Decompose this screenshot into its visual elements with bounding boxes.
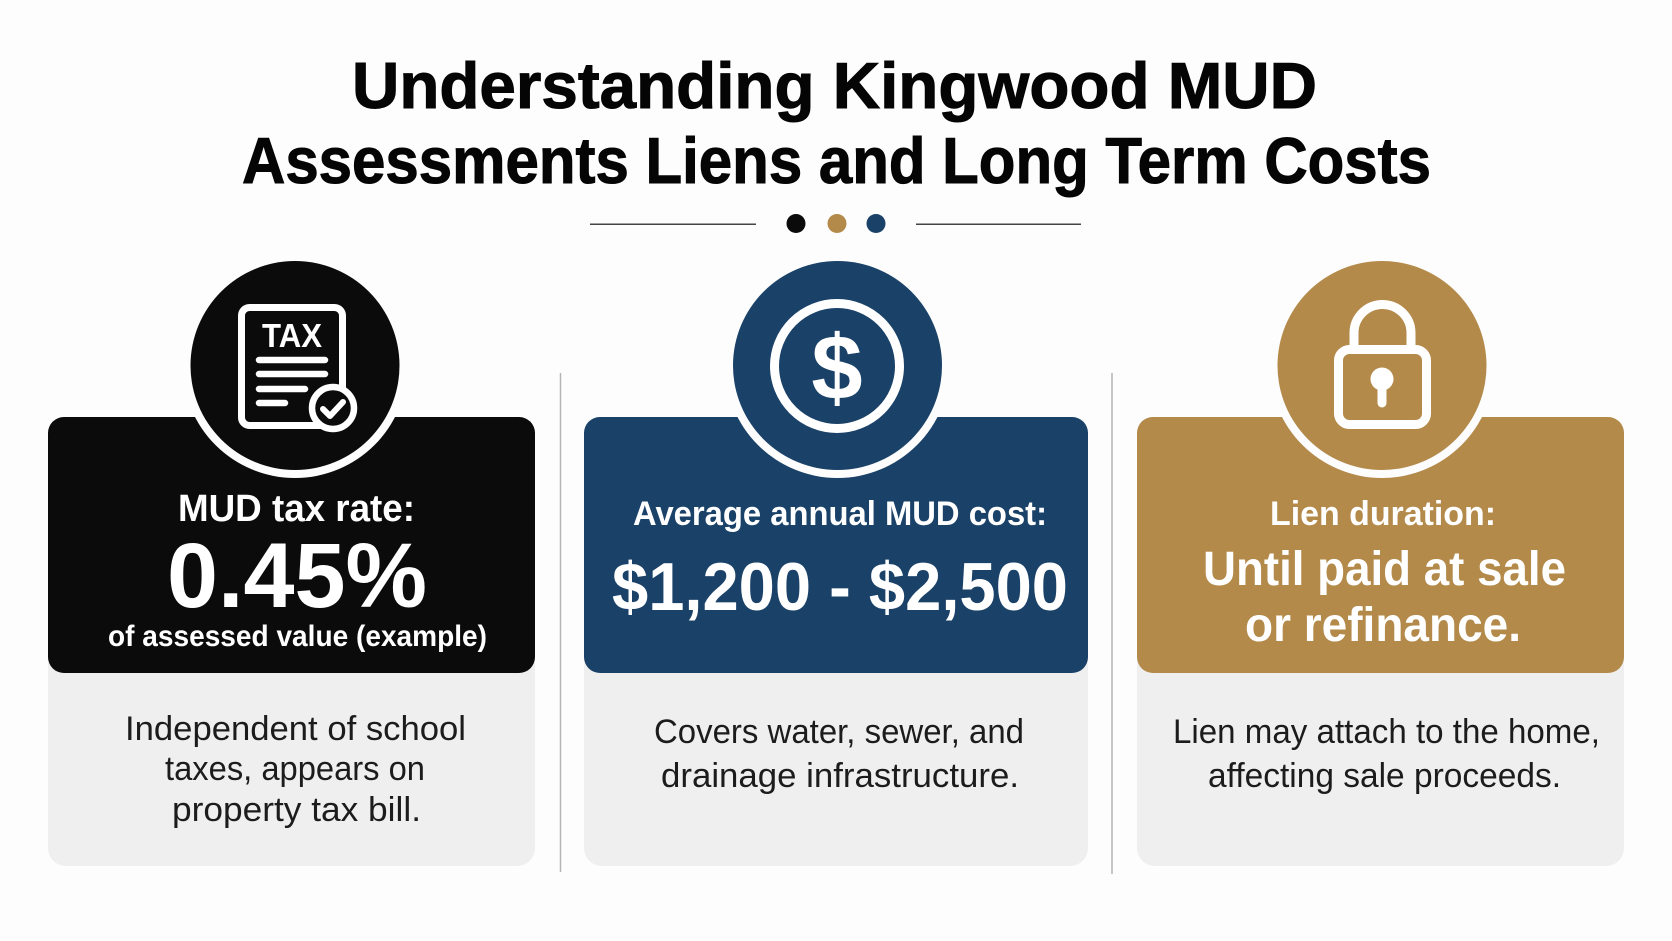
icon: tax document with check: TAX	[262, 317, 322, 354]
title divider with three dots	[590, 214, 1081, 233]
label: lien duration: Lien duration:	[1270, 495, 1496, 533]
description: MUD tax rate	[125, 710, 466, 829]
panel: MUD tax rate	[48, 253, 535, 866]
description: lien	[1173, 713, 1600, 795]
value: until paid: Until paid at sale	[1203, 543, 1566, 596]
description: MUD tax rate: Independent of school	[125, 710, 466, 748]
sublabel: of assessed value: of assessed value (example)	[108, 620, 487, 653]
icon: tax document with check	[242, 308, 354, 429]
description: MUD tax rate: property tax bill.	[172, 791, 421, 829]
panel: average annual MUD cost	[584, 253, 1088, 866]
label: average annual MUD cost: Average annual MUD cost:	[633, 495, 1047, 533]
value: 0.45%: 0.45%	[167, 525, 427, 627]
title: Understanding Kingwood MUD	[352, 49, 1317, 122]
description: MUD tax rate: taxes, appears on	[165, 750, 425, 788]
description: lien: affecting sale proceeds.	[1208, 757, 1561, 795]
description: lien: Lien may attach to the home,	[1173, 713, 1600, 751]
title	[242, 49, 1431, 197]
title: Assessments Liens and Long Term Costs	[242, 124, 1431, 197]
icon: dollar coin: $	[811, 317, 863, 419]
description: annual cost: drainage infrastructure.	[661, 757, 1019, 795]
value: until paid: or refinance.	[1245, 599, 1521, 652]
value: until paid	[1203, 543, 1566, 652]
description: annual cost: Covers water, sewer, and	[654, 713, 1024, 751]
icon: padlock	[1338, 304, 1426, 424]
label: MUD tax rate: MUD tax rate:	[178, 488, 415, 530]
icon: dollar coin	[774, 304, 900, 428]
description: annual cost	[654, 713, 1024, 795]
value: cost range: $1,200 - $2,500	[612, 549, 1068, 625]
panel: lien duration	[1137, 253, 1624, 866]
